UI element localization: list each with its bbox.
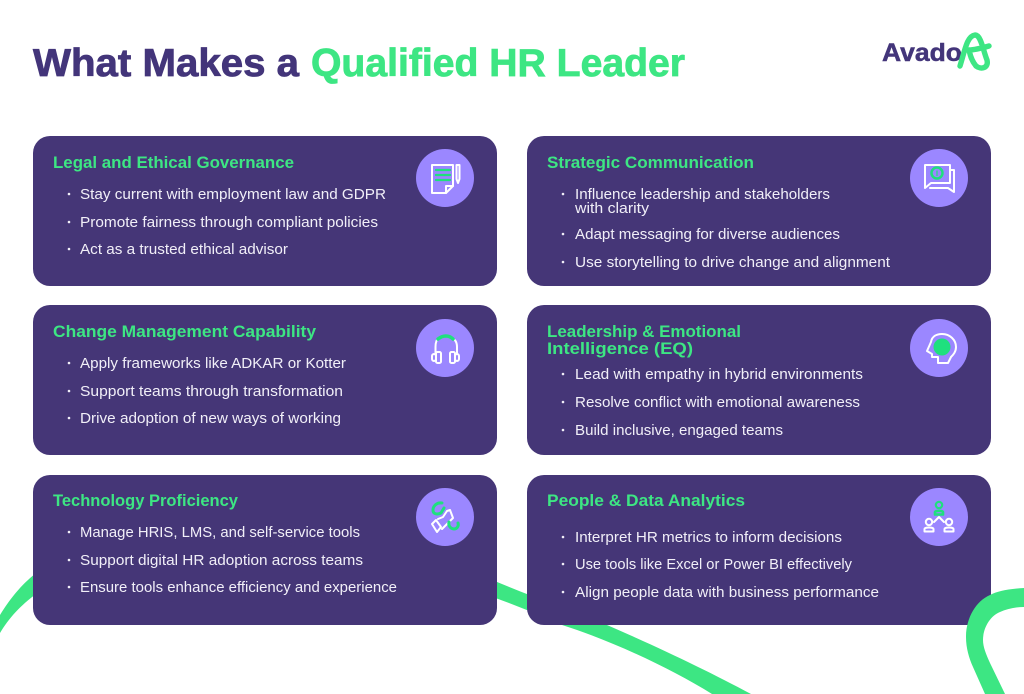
heading: Technology Proficiency — [53, 491, 239, 510]
panel: Strategic Communication — [527, 136, 991, 286]
bullet list: Act as a trusted ethical advisor — [80, 242, 288, 258]
bullet list — [68, 187, 386, 258]
heading: People & Data Analytics — [547, 491, 745, 510]
icon: head with brain — [910, 319, 968, 377]
bullet list: Use storytelling to drive change and alignment — [575, 255, 890, 271]
bullet list: Ensure tools enhance efficiency and experience — [80, 580, 397, 596]
panel: Change Management Capability — [33, 305, 497, 455]
bullet list — [562, 187, 890, 271]
bullet list: Build inclusive, engaged teams — [575, 423, 783, 439]
heading: Leadership & Emotional — [547, 322, 741, 341]
icon: people network — [910, 488, 968, 546]
icon: hand with wrenches — [416, 488, 474, 546]
background green ribbon right — [966, 588, 1024, 694]
bullet list — [68, 525, 397, 596]
heading: Strategic Communication — [547, 153, 754, 172]
background green ribbon left and middle — [0, 573, 751, 694]
icon: headset — [416, 319, 474, 377]
bullet list — [562, 530, 879, 601]
bullet list: Promote fairness through compliant policies — [80, 215, 378, 231]
bullet list: Manage HRIS, LMS, and self-service tools — [80, 525, 360, 541]
logo: Avado: Avado — [882, 39, 962, 67]
panel: Technology Proficiency — [33, 475, 497, 625]
heading — [547, 322, 741, 358]
bullet list: Use tools like Excel or Power BI effectively — [575, 557, 853, 573]
panel: Leadership & Emotional Intelligence (EQ) — [527, 305, 991, 455]
panel: People & Data Analytics — [527, 475, 991, 625]
bullet list: Apply frameworks like ADKAR or Kotter — [80, 356, 346, 372]
bullet list: Stay current with employment law and GDPR — [80, 187, 386, 203]
icon: speech bubbles — [910, 149, 968, 207]
panel: Legal and Ethical Governance — [33, 136, 497, 286]
bullet list — [562, 367, 863, 439]
bullet list: Align people data with business performance — [575, 585, 879, 601]
logo: Avado — [882, 35, 989, 68]
bullet list: Support teams through transformation — [80, 384, 343, 400]
heading: Change Management Capability — [53, 322, 317, 341]
bullet list: with clarity — [574, 201, 650, 217]
title: Qualified HR Leader — [311, 42, 685, 85]
bullet list: Support digital HR adoption across teams — [80, 553, 363, 569]
title: What Makes a — [33, 42, 299, 85]
bullet list: Influence leadership and stakeholders — [575, 187, 830, 203]
icon: document and pen — [416, 149, 474, 207]
bullet list: Lead with empathy in hybrid environments — [575, 367, 863, 383]
heading: Intelligence (EQ) — [547, 339, 693, 358]
bullet list: Adapt messaging for diverse audiences — [575, 227, 840, 243]
title — [33, 42, 685, 85]
bullet list — [68, 356, 346, 427]
bullet list: Resolve conflict with emotional awareness — [575, 395, 860, 411]
bullet list: Drive adoption of new ways of working — [80, 411, 341, 427]
heading: Legal and Ethical Governance — [53, 153, 294, 172]
bullet list: Interpret HR metrics to inform decisions — [575, 530, 842, 546]
